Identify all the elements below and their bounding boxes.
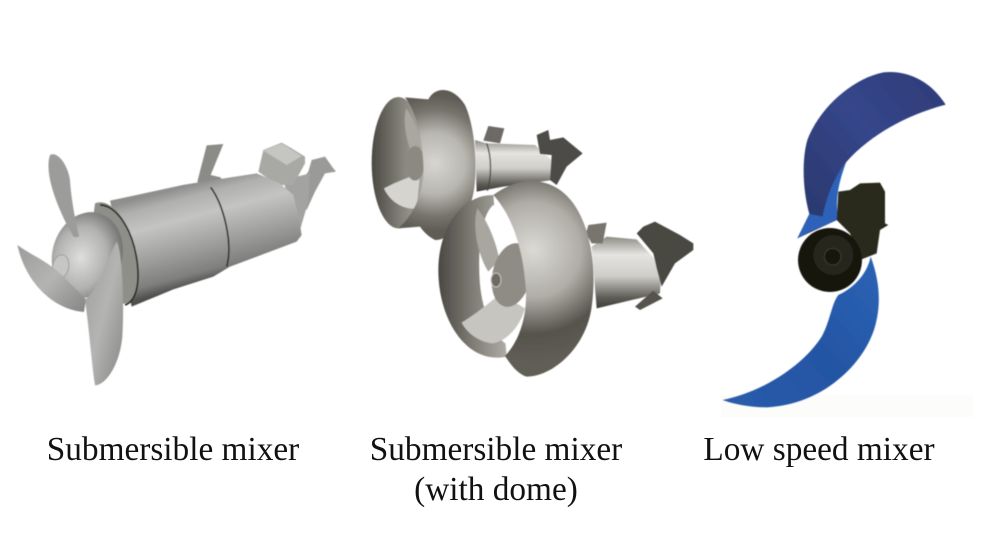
rear unit hub (406, 146, 424, 181)
front unit upper blade (475, 208, 499, 272)
caption: submersible mixer: Submersible mixer (47, 431, 299, 468)
rear unit duct inlet (372, 97, 425, 228)
housing band (211, 187, 229, 267)
front unit back bracket (637, 222, 693, 287)
front unit duct (493, 181, 594, 377)
caption: submersible mixer with dome: Submersible mixer (370, 431, 622, 468)
product: low speed mixer (723, 72, 946, 407)
motor hub (824, 248, 841, 265)
motor face (798, 228, 862, 292)
front unit top bracket (586, 223, 607, 243)
motor housing (110, 173, 302, 307)
front unit hub (486, 239, 537, 311)
hub cap (50, 253, 71, 280)
caption: low speed mixer: Low speed mixer (703, 431, 935, 468)
mounting bracket (197, 144, 223, 188)
motor ring (813, 235, 853, 275)
rear unit body (475, 140, 553, 192)
junction box (258, 143, 305, 185)
rear unit (372, 90, 583, 240)
front unit body (592, 237, 662, 308)
rear unit duct (398, 90, 476, 240)
hub (42, 204, 132, 306)
rear unit blades (384, 173, 420, 209)
rear unit collar line (487, 143, 491, 191)
rear bracket (297, 157, 336, 210)
junction box cover (263, 143, 302, 165)
lower blade (723, 257, 879, 407)
front unit duct inlet (438, 195, 507, 358)
caption: submersible mixer with dome: (with dome) (414, 471, 578, 508)
front unit foot (635, 291, 663, 310)
blade root highlight (797, 163, 846, 238)
left blade (17, 245, 86, 312)
front unit opening (479, 205, 533, 347)
front unit lower blade (462, 293, 525, 343)
rear unit back bracket (537, 130, 583, 185)
product: submersible mixer with dome (372, 90, 693, 377)
upper blade (797, 72, 946, 238)
front unit hub cap (491, 273, 501, 287)
rear connector (283, 173, 310, 230)
product: submersible mixer (17, 143, 336, 385)
rear unit top bracket (483, 126, 504, 143)
front collar (83, 202, 138, 304)
lower blade (85, 242, 123, 385)
gearbox housing (837, 183, 888, 260)
front unit (438, 181, 693, 377)
upper blade (48, 154, 79, 237)
